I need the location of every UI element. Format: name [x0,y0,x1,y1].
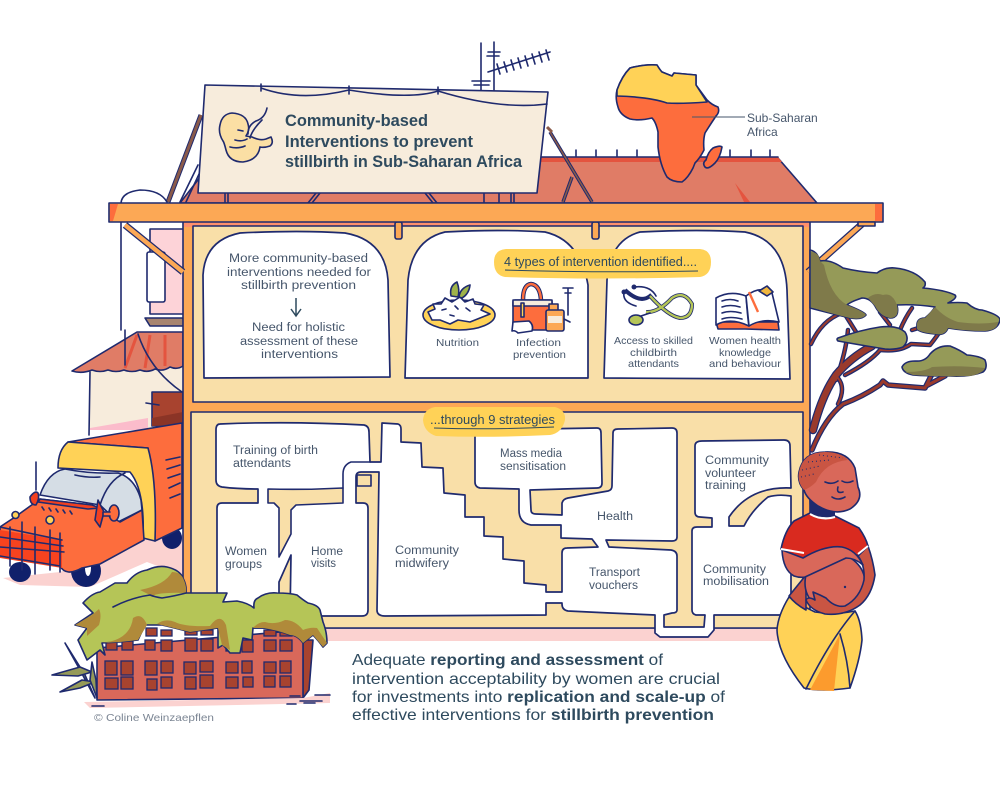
title banner [198,84,548,193]
room label: community midwifery: Community [395,545,459,557]
room label: community volunteer training: Community [705,455,769,467]
room label: community volunteer training [705,455,769,492]
foliage [75,566,327,660]
room label: community mobilisation: Community [703,564,766,576]
icon: stethoscope [622,284,692,325]
house structure [183,222,810,637]
card: need for holistic assessment: assessment of these [240,336,358,348]
room label: health: Health [597,511,633,523]
roof beam [109,203,883,222]
highlight: 4 types of intervention [494,249,711,278]
room label: community volunteer training: volunteer [705,468,756,480]
sleeve cuffs [781,546,868,554]
room label: women groups [225,546,267,571]
Africa map with Sub-Saharan region highlighted [616,65,745,182]
arrow: leads to [291,298,301,316]
icon: nutrition plate [423,282,495,330]
card: nutrition and infection prevention: Infection [516,337,561,349]
pregnant woman [777,452,875,691]
banner title text: stillbirth in Sub-Saharan Africa [285,152,523,171]
card: skilled attendants and women knowledge: childbirth [630,347,677,359]
conclusion text: for investments into replication and scale-up of [352,689,726,706]
card: skilled attendants and women knowledge: and behaviour [709,358,782,370]
card: skilled attendants and women knowledge: Women health [709,335,781,347]
floor plan of connected rooms [216,423,791,637]
conclusion text: effective interventions for stillbirth prevention [352,707,714,724]
room label: transport vouchers [589,567,641,592]
windows [105,628,292,690]
middle canopy [837,327,907,349]
label: Sub-Saharan Africa: Africa [747,125,778,139]
left arm across chest [782,547,863,577]
room label: community volunteer training: training [705,480,746,492]
card: nutrition and infection prevention: prevention [513,349,566,361]
highlight: 9 strategies: ...through 9 strategies [430,413,555,427]
room label: home visits: visits [311,558,336,570]
neck shadow [809,495,835,518]
conclusion text: Adequate reporting and assessment of [352,652,664,669]
plant [52,643,97,698]
room label: women groups: Women [225,546,267,558]
card: need for holistic assessment: More community-based [229,253,368,265]
torso shadow [789,575,806,610]
banner title text [285,111,523,171]
panel: upper floor [193,222,803,402]
card: nutrition and infection prevention [405,230,588,378]
card: need for holistic assessment: Need for holistic [252,322,345,334]
banner title text: Community-based [285,111,428,130]
card: skilled attendants and women knowledge [604,230,790,379]
belly [805,554,865,612]
copyright: © Coline Weinzaepflen [94,712,214,724]
room label: training of birth attendants: Training of birth [233,445,318,457]
card: nutrition and infection prevention: Nutrition [436,337,479,349]
conclusion text: intervention acceptability by women are crucial [352,671,720,688]
banner supports [168,115,592,203]
room label: mass media sensitisation: sensitisation [500,461,566,473]
antenna [472,42,550,92]
right arm holding belly [806,546,875,614]
card: need for holistic assessment: interventions needed for [227,267,371,279]
highlight: 4 types of intervention: 4 types of intervention identified.... [504,255,697,269]
branches [811,308,945,450]
room label: transport vouchers: Transport [589,567,641,579]
panel: lower floor strategies [191,407,803,637]
room label: women groups: groups [225,559,262,571]
card: skilled attendants and women knowledge: knowledge [719,347,771,359]
label: Sub-Saharan Africa: Sub-Saharan [747,111,818,125]
ground shadow [3,535,778,641]
icon: open book [716,286,779,330]
roof [180,150,817,203]
truck [0,423,182,587]
room label: community midwifery [395,545,459,570]
room label: mass media sensitisation [500,448,566,473]
side pink annex and wires [121,190,184,392]
skirt [777,597,862,690]
room label: mass media sensitisation: Mass media [500,448,563,460]
room label: community mobilisation [703,564,769,588]
room label: training of birth attendants [233,445,318,470]
wheels [9,527,182,587]
room label: home visits [311,546,343,570]
card: need for holistic assessment [203,232,390,378]
lower canopy [902,346,986,376]
room label: community midwifery: midwifery [395,558,449,570]
card: need for holistic assessment: interventions [261,349,338,361]
banner title text: Interventions to prevent [285,132,473,151]
card: skilled attendants and women knowledge: attendants [628,358,679,370]
conclusion text [352,652,726,724]
acacia tree [810,250,1000,450]
icon: fetus [219,108,272,162]
head [799,452,860,512]
card: skilled attendants and women knowledge: Access to skilled [614,335,693,347]
highlight: 9 strategies [423,407,565,437]
braces [125,222,875,272]
left small house [72,332,183,435]
room label: community mobilisation: mobilisation [703,576,769,588]
room label: transport vouchers: vouchers [589,580,638,592]
card: need for holistic assessment: stillbirth prevention [241,280,356,292]
brick building with foliage [52,566,330,708]
icon: infection prevention kit [512,284,573,333]
room label: home visits: Home [311,546,343,558]
room label: training of birth attendants: attendants [233,458,291,470]
shirt [781,513,868,560]
main canopy [810,250,1000,334]
